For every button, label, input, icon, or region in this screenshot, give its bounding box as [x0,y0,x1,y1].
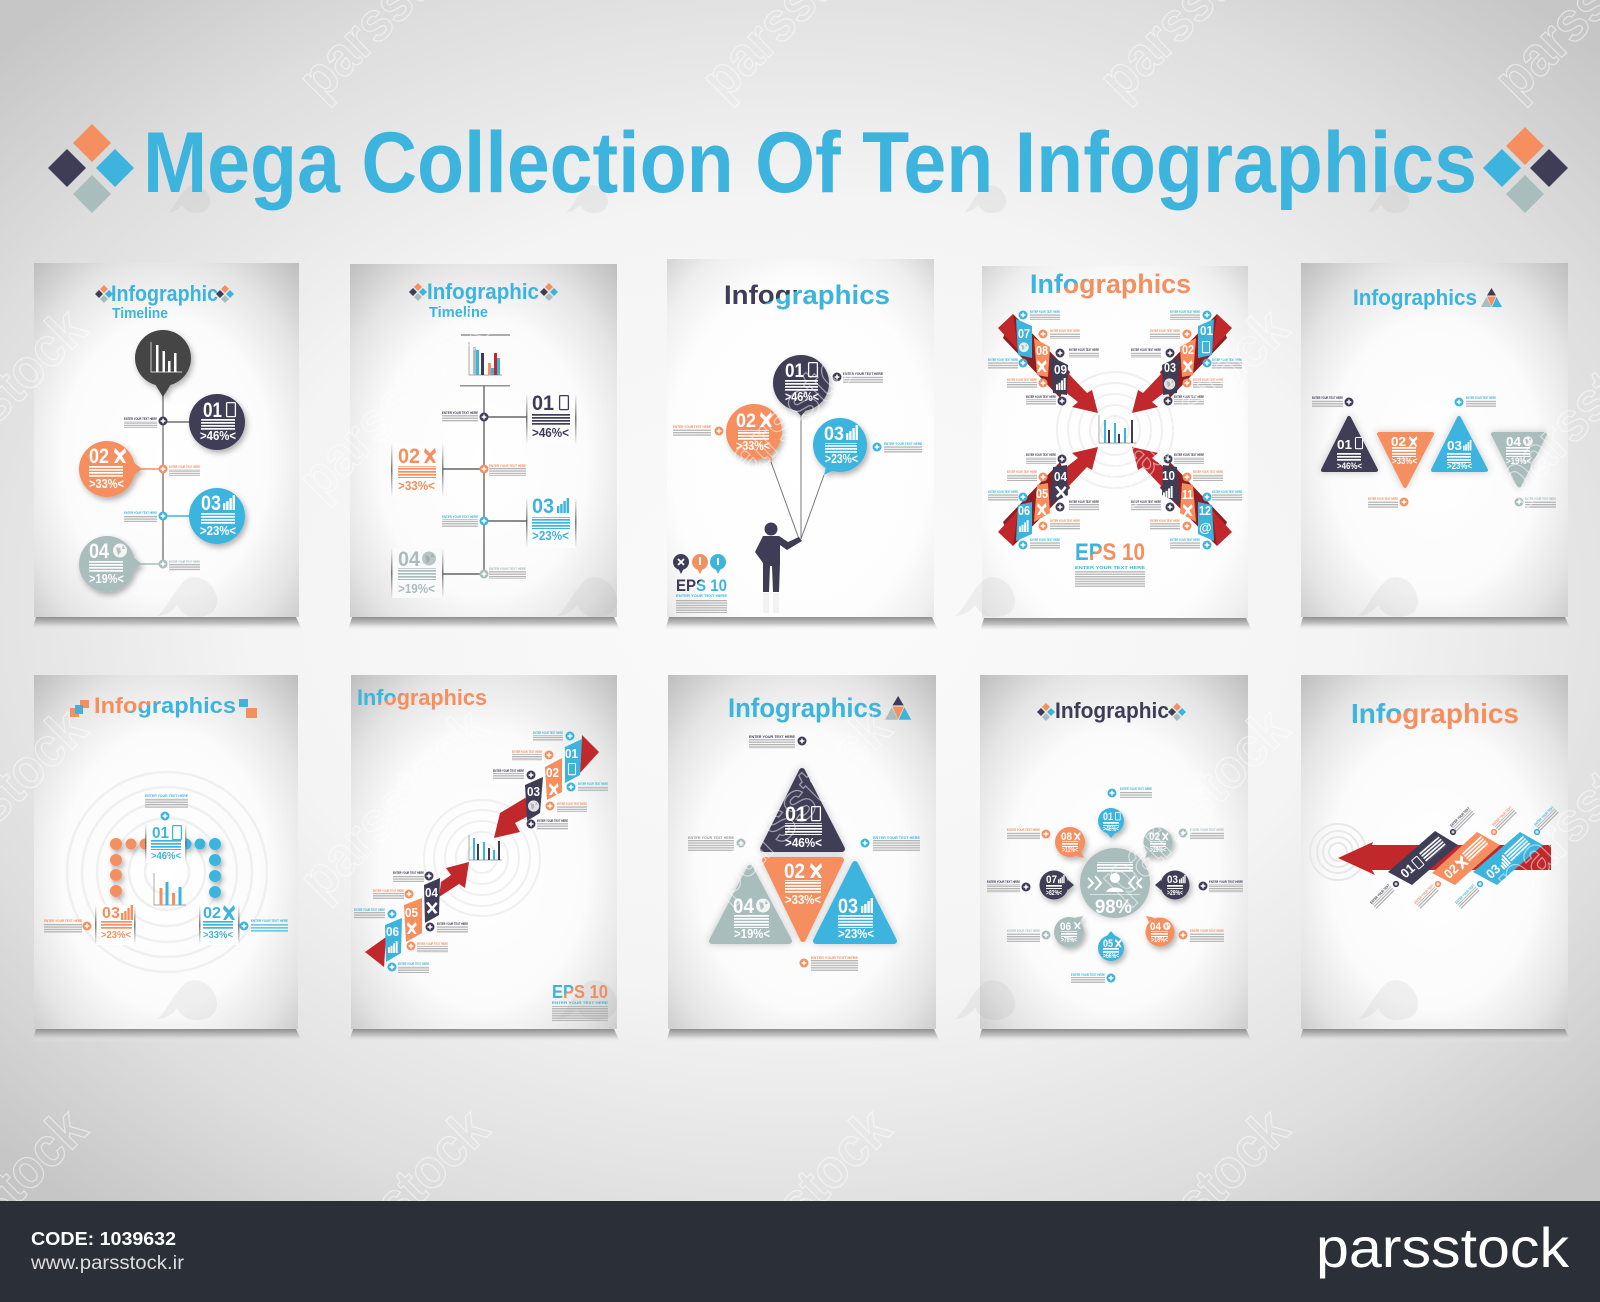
step 02 card: >33%< [203,930,233,941]
EPS 10 block: ENTER YOUR TEXT HERE [676,594,728,598]
satellite 07: 07 [1046,874,1057,886]
labels bottom left [988,453,1099,550]
panel 9 sheet [978,675,1252,1042]
EPS 10 block [552,982,609,1021]
step 03 label: ENTER YOUR TEXT HERE [124,511,157,515]
triangle 04 label [1514,497,1556,508]
triangle 03: >23%< [1447,461,1472,471]
balloon 01 label: ENTER YOUR TEXT HERE [843,372,883,376]
triangle 04: 04 [733,895,754,918]
step 04 bubble [79,536,168,592]
balloon 02 label: ENTER YOUR TEXT HERE [673,425,711,429]
step 02 label [169,465,200,476]
satellite labels: ENTER YOUR TEXT HERE [1209,880,1243,884]
triangle 02: 02 [1391,434,1406,449]
triangle 01: 01 [785,803,807,826]
upper labels: ENTER YOUR TEXT HERE [537,819,568,823]
panel 10: horizontal arrow with ribbons [1299,675,1571,1042]
step 04 label: ENTER YOUR TEXT HERE [169,560,200,564]
satellite labels: ENTER YOUR TEXT HERE [1007,828,1040,832]
watermark wordmarks: parsstock [1086,296,1301,510]
step 02 card [199,905,240,945]
lower labels: ENTER YOUR TEXT HERE [398,962,429,966]
triangle 04 label: ENTER YOUR TEXT HERE [688,836,734,840]
satellite labels: ENTER YOUR TEXT HERE [1007,929,1040,933]
arrow bottom right, steps 10 to 12: 10 [1162,468,1175,483]
upper labels: ENTER YOUR TEXT HERE [493,769,524,773]
panel 6: dots and cards over rings [32,675,302,1042]
satellite 07 [1040,870,1074,900]
step 02 card: >33%< [398,478,435,493]
arrow top right, steps 01 to 03: 03 [1164,360,1176,375]
arrow top left, steps 07 to 09 [998,314,1098,413]
rotated labels: ENTER YOUR TEXT [1455,883,1476,905]
triangle 04: >19%< [1506,456,1531,466]
step 03 card: 03 [102,905,120,922]
EPS 10 block: EPS 10 [676,576,727,595]
triangle 01 [763,771,842,850]
panel 8: triangle pyramid [666,675,940,1042]
labels top right: ENTER YOUR TEXT HERE [1150,329,1180,333]
balloon 03 label: ENTER YOUR TEXT HERE [884,442,922,446]
brand wordmark: parsstock [1316,1216,1570,1279]
footer bar [0,1201,1600,1302]
step 01 label: ENTER YOUR TEXT HERE [442,411,478,415]
panel 4 sheet [980,266,1252,631]
step 02 label: ENTER YOUR TEXT HERE [489,464,526,468]
arrow bottom right, steps 10 to 12: 11 [1182,487,1193,502]
ribbon 03: 03 [1483,861,1503,882]
website address: www.parsstock.ir [30,1253,185,1274]
lower arrow section, steps 04 to 06: 06 [386,924,399,939]
panel 6 bar chart [154,873,186,905]
red arrow [1338,842,1551,875]
triangle 04: 04 [1506,434,1522,449]
balloon 01 [773,355,829,416]
arrow top right, steps 01 to 03: 01 [1200,323,1213,338]
triangle 04: >19%< [734,926,770,941]
triangle 01 label [749,735,806,749]
step 01 label [124,417,157,428]
step 01 bubble: 01 [203,399,222,422]
arrow top left, steps 07 to 09: 09 [1054,362,1067,377]
panel 2 heading: Infographic [427,279,539,304]
rotated labels: ENTER YOUR TEXT [1414,883,1435,905]
panel 7 sheet [349,675,620,1042]
triangle 04 label: ENTER YOUR TEXT HERE [1525,497,1556,501]
satellite 04: >18%< [1151,937,1168,944]
concentric rings [1310,824,1366,880]
panel 6 heading: Infographics [94,693,236,718]
lower arrow section, steps 04 to 06: 05 [405,905,418,920]
step 01 card: 01 [152,825,169,842]
icon: right title diamonds [1483,127,1568,213]
concentric rings [424,800,540,916]
panel 10 sheet [1299,675,1571,1042]
balloon strings [771,415,824,539]
lower arrow section, steps 04 to 06 [365,862,469,967]
triangle 01: 01 [1337,437,1352,452]
ribbon 01 [1388,831,1458,885]
rotated labels: ENTER YOUR TEXT [1534,805,1555,827]
rotated labels: ENTER YOUR TEXT [1450,806,1471,828]
watermark wordmarks: parsstock [688,696,903,910]
triangle 03 label [860,836,920,851]
icon: left title diamonds [48,124,134,213]
step 01 label [442,411,478,422]
lower arrow section, steps 04 to 06: 04 [425,885,439,900]
EPS 10 block [1075,539,1145,588]
labels bottom right: ENTER YOUR TEXT HERE [1174,453,1204,457]
triangle 02: >33%< [1392,456,1417,466]
panel 2 sheet [348,264,620,630]
labels bottom right: ENTER YOUR TEXT HERE [1131,500,1161,504]
satellite 01: 01 [1103,811,1113,823]
satellite labels: ENTER YOUR TEXT HERE [1120,787,1152,791]
satellite 03: 03 [1167,874,1178,886]
ribbon 03 [1473,832,1543,885]
triangle 03 label [1454,396,1496,407]
satellite 05: >66%< [1103,953,1119,960]
arrow bottom left, steps 04 to 06: 05 [1036,486,1048,501]
triangle 03: 03 [838,895,858,918]
step 02 label [240,919,288,933]
step 03 label [44,919,92,933]
step 01 card [480,392,576,445]
step 02 card: 02 [203,905,221,922]
step 02 label: ENTER YOUR TEXT HERE [251,919,288,923]
arrow bottom right, steps 10 to 12: 12 [1199,503,1211,518]
step 02 bubble [79,441,168,497]
lower labels: ENTER YOUR TEXT HERE [417,942,448,946]
labels top left: ENTER YOUR TEXT HERE [1030,310,1060,314]
labels top right [1131,310,1242,406]
center hub 98% [1080,848,1150,918]
person holding balloons [755,522,802,613]
step 03 bubble [158,488,245,544]
triangle 03: 03 [1447,438,1462,453]
satellite 02 [1144,828,1172,859]
step 03 bubble: >23%< [200,523,236,538]
balloon 03 [813,418,867,475]
concentric rings [67,772,267,972]
step 04 label [169,560,200,571]
balloon 02 label [673,425,724,436]
triangle 02 label [800,956,858,971]
step 01 card [145,823,186,863]
satellite 08: >11%< [1062,847,1078,854]
EPS 10 block [676,576,728,613]
EPS 10 block: ENTER YOUR TEXT HERE [552,1001,609,1005]
satellite 03: >29%< [1167,890,1183,897]
panel 2 bar chart [460,334,510,386]
panel 9: radial hub [978,675,1252,1042]
step 03 label: ENTER YOUR TEXT HERE [442,515,478,519]
triangle 01: >46%< [1337,461,1362,471]
labels top left [988,310,1099,406]
labels bottom left: ENTER YOUR TEXT HERE [1007,470,1037,474]
upper arrow section, steps 01 to 03 [494,735,599,838]
triangle 03 [816,864,894,941]
triangle 02 [1379,434,1432,486]
triangle 04 label [688,836,746,851]
step 01 label: ENTER YOUR TEXT HERE [124,417,157,421]
ribbon 02: 02 [1441,861,1461,882]
panel 1: timeline with bubbles [32,263,302,630]
labels top right: ENTER YOUR TEXT HERE [1170,310,1200,314]
rotated labels: ENTER YOUR TEXT [1370,883,1391,905]
step 04 card [391,548,488,598]
labels bottom right: ENTER YOUR TEXT HERE [1212,490,1242,494]
satellite 06 [1054,916,1084,947]
balloon 02 [726,404,782,462]
labels bottom right: ENTER YOUR TEXT HERE [1170,538,1200,542]
watermark wordmarks: parsstock [692,296,907,510]
triangle 01 label: ENTER YOUR TEXT HERE [1312,396,1343,400]
upper labels: ENTER YOUR TEXT HERE [512,750,542,754]
balloon 01: 01 [785,361,804,382]
step 03 bubble: 03 [201,492,221,515]
step 03 label: ENTER YOUR TEXT HERE [44,919,82,923]
satellite 04: 04 [1150,921,1162,933]
panel 10 heading: Infographics [1351,698,1519,729]
labels top right: ENTER YOUR TEXT HERE [1193,378,1223,382]
panel 8 heading: Infographics [728,693,882,723]
satellite 01 [1098,808,1124,838]
panel 7 bar chart [469,835,502,860]
upper arrow section, steps 01 to 03: 02 [546,765,559,780]
mini pin icons [673,554,726,574]
satellite 06: >79%< [1061,937,1077,944]
EPS 10 block: EPS 10 [552,982,608,1002]
triangle 03: >23%< [838,926,874,941]
labels top left: ENTER YOUR TEXT HERE [1050,329,1080,333]
upper labels: ENTER YOUR TEXT HERE [578,782,608,786]
satellite 08: 08 [1061,831,1072,843]
step 04 bubble: >19%< [89,571,124,586]
arrow bottom right, steps 10 to 12 [1132,447,1232,546]
satellite 05 [1098,931,1124,961]
step 03 label [442,515,478,527]
labels bottom left: ENTER YOUR TEXT HERE [1030,538,1060,542]
step 02 label: ENTER YOUR TEXT HERE [169,465,200,469]
step 03 card: >23%< [101,930,131,941]
labels top left: ENTER YOUR TEXT HERE [1069,348,1099,352]
step 02 card [391,443,488,497]
satellite 02: >29%< [1150,847,1166,854]
upper labels [493,731,608,830]
step 04 label: ENTER YOUR TEXT HERE [489,567,526,571]
labels top right: ENTER YOUR TEXT HERE [1212,358,1242,362]
step 02 bubble: 02 [89,445,109,468]
lower labels: ENTER YOUR TEXT HERE [393,871,424,875]
balloon 01: >46%< [785,389,819,404]
lower labels: ENTER YOUR TEXT HERE [354,908,385,912]
step 02 label [489,464,526,476]
panel 4 heading: Infographics [1030,269,1191,299]
step 03 card: >23%< [532,528,569,543]
labels bottom left: ENTER YOUR TEXT HERE [1050,519,1080,523]
triangle 02: 02 [784,860,805,883]
panel 7: diagonal arrow [349,675,620,1042]
labels bottom right: ENTER YOUR TEXT HERE [1193,470,1223,474]
step 03 label [124,511,157,522]
triangle 01 [1323,418,1376,471]
step 04 card: 04 [398,548,420,571]
blue dots [180,838,221,898]
arrow bottom left, steps 04 to 06: 06 [1018,503,1030,518]
orange dots [110,838,150,897]
watermark wordmarks: parsstock [285,296,500,510]
step 03 card: 03 [532,495,554,518]
panel 5 heading: Infographics [1353,285,1477,310]
balloon 02: 02 [736,411,756,432]
balloon 02: >33%< [736,438,770,453]
satellite 03 [1155,870,1190,900]
labels top left: ENTER YOUR TEXT HERE [1026,395,1056,399]
arrow top left, steps 07 to 09: 07 [1018,326,1030,341]
triangle 02: >33%< [785,892,821,907]
arrow top right, steps 01 to 03 [1132,314,1232,413]
balloon 03 label [872,442,922,453]
center bar chart [1099,415,1136,443]
satellite labels [987,787,1243,984]
labels top left: ENTER YOUR TEXT HERE [1007,378,1037,382]
labels top left: ENTER YOUR TEXT HERE [988,358,1018,362]
labels top right: ENTER YOUR TEXT HERE [1174,395,1204,399]
labels bottom left: ENTER YOUR TEXT HERE [1026,453,1056,457]
ribbon 01: 01 [1397,860,1418,881]
panel 1 subheading: Timeline [112,305,168,322]
panel 1 sheet [32,263,302,630]
panel 4: four arrows [980,266,1252,631]
panel 3 sheet [665,259,938,630]
triangle 03 label: ENTER YOUR TEXT HERE [873,836,920,840]
panel 2 subheading: Timeline [429,304,488,321]
labels top right: ENTER YOUR TEXT HERE [1131,348,1161,352]
triangle 01: >46%< [785,835,822,850]
timeline axis [162,390,164,564]
step 01 bubble: >46%< [200,428,236,443]
satellite labels: ENTER YOUR TEXT HERE [1071,973,1105,977]
image code: CODE: 1039632 [31,1229,176,1249]
panel 8 sheet [666,675,940,1042]
panel 6 sheet [32,675,302,1042]
title: Mega Collection Of Ten Infographics [143,115,1477,211]
panel 7 heading: Infographics [357,685,487,710]
step 04 bubble: 04 [89,540,109,563]
panel 3: balloons [665,259,938,630]
triangle 04 [712,868,789,941]
step 02 card: 02 [398,445,420,468]
step 04 label [489,567,526,579]
panel 2: timeline with cards [348,264,620,630]
triangle 02 label: ENTER YOUR TEXT HERE [811,956,858,960]
satellite 01: >46%< [1103,826,1119,833]
step 02 bubble: >33%< [89,476,124,491]
satellite 02: 02 [1149,831,1160,843]
upper labels: ENTER YOUR TEXT HERE [533,731,563,735]
panel 5: triangles row [1299,263,1571,630]
concentric rings [1057,372,1173,488]
lower labels: ENTER YOUR TEXT HERE [373,889,404,893]
rotated labels [1370,805,1559,909]
satellite 06: 06 [1060,921,1071,933]
step 04 card: >19%< [398,581,435,596]
watermark wordmarks: parsstock [286,696,501,910]
labels bottom left: ENTER YOUR TEXT HERE [988,490,1018,494]
triangle 04 [1493,434,1545,486]
arrow top left, steps 07 to 09: 08 [1036,343,1048,358]
step 01 label: ENTER YOUR TEXT HERE [145,794,188,798]
lower labels [354,871,468,973]
EPS 10 block: EPS 10 [1075,539,1145,566]
lower labels: ENTER YOUR TEXT HERE [437,922,468,926]
EPS 10 block: ENTER YOUR TEXT HERE [1075,565,1145,570]
arrow bottom left, steps 04 to 06: 04 [1054,469,1068,484]
satellite 07: >82%< [1046,890,1062,897]
step 03 card [95,905,136,945]
labels bottom right [1131,453,1242,550]
arrow top right, steps 01 to 03: 02 [1182,342,1194,357]
step 01 card: 01 [532,392,554,415]
upper labels: ENTER YOUR TEXT HERE [557,802,587,806]
rotated labels: ENTER YOUR TEXT [1492,805,1513,827]
panel 3 heading: Infographics [724,280,890,310]
center hub 98%: 98% [1095,897,1132,918]
balloon 03: >23%< [825,451,858,466]
panel 9 heading: Infographic [1055,698,1169,723]
triangle 02 [765,860,841,939]
ribbon 02 [1432,832,1500,885]
upper arrow section, steps 01 to 03: 03 [527,784,540,799]
satellite 05: 05 [1103,938,1113,950]
satellite 08 [1055,827,1085,858]
balloon 01 label [832,372,883,383]
satellite labels: ENTER YOUR TEXT HERE [987,880,1020,884]
panel 1 heading: Infographic [111,281,218,306]
watermark wordmarks: parsstock [1086,696,1301,910]
watermark logos [157,185,1418,1020]
timeline axis [443,386,527,574]
balloon 03: 03 [824,424,844,445]
triangle 03 label: ENTER YOUR TEXT HERE [1466,396,1496,400]
triangle 02 label: ENTER YOUR TEXT HERE [1368,497,1398,501]
step 01 bubble [158,394,245,450]
step 01 label [145,794,188,820]
labels bottom right: ENTER YOUR TEXT HERE [1150,519,1180,523]
labels bottom left: ENTER YOUR TEXT HERE [1069,500,1099,504]
step 01 card: >46%< [151,851,181,862]
upper arrow section, steps 01 to 03: 01 [565,746,578,761]
triangle 01 label [1312,396,1354,407]
panel 5 sheet [1299,263,1571,630]
pin with bar chart [135,330,191,397]
satellite labels: ENTER YOUR TEXT HERE [1190,828,1224,832]
triangle 02 label [1368,497,1408,508]
triangle 03 [1433,418,1486,471]
step 01 card: >46%< [532,425,569,440]
satellite 04 [1146,916,1174,946]
arrow bottom right, steps 10 to 12: @ [1199,520,1212,535]
arrow bottom left, steps 04 to 06 [998,447,1098,546]
triangle 01 label: ENTER YOUR TEXT HERE [749,735,795,739]
step 03 card [480,495,576,548]
satellite labels: ENTER YOUR TEXT HERE [1190,929,1224,933]
